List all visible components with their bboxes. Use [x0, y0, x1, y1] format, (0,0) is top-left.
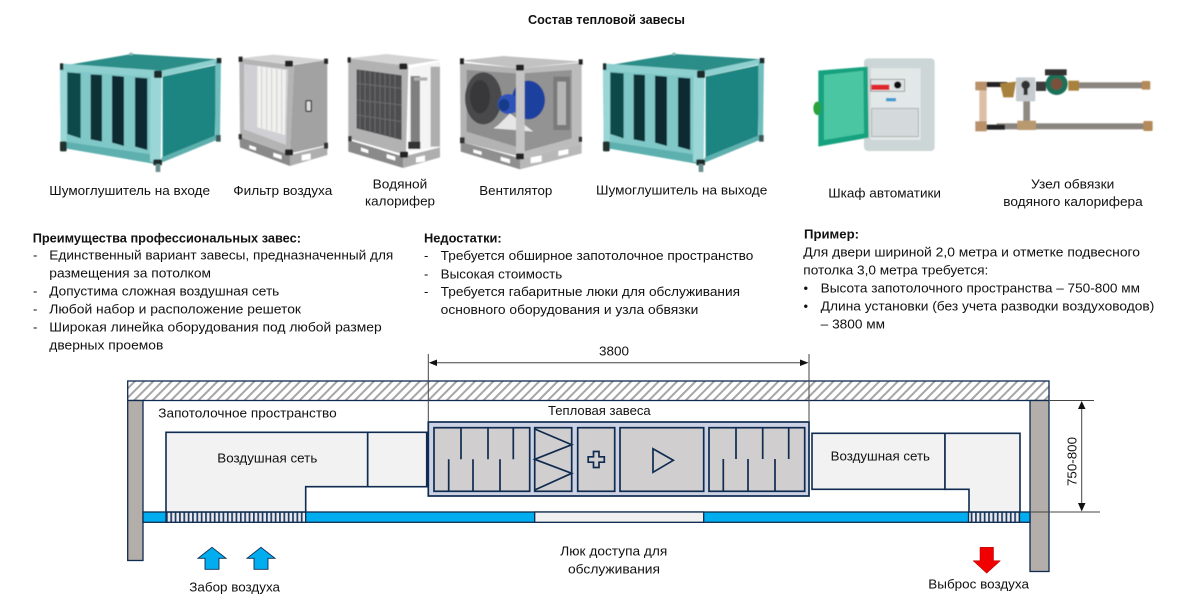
text block: example: Высота запотолочного пространства – 750-800 мм [821, 280, 1140, 295]
left air duct [166, 432, 368, 512]
fan section [620, 428, 704, 491]
caption: outlet silencer: Шумоглушитель на выходе [596, 182, 767, 197]
text block: advantages: Широкая линейка оборудования под любой размер [49, 320, 382, 335]
outlet silencer section [709, 428, 805, 491]
text block: advantages: - [33, 320, 37, 335]
text block: disadvantages: Требуется габаритные люки для обслуживания [441, 284, 740, 299]
icon: water heater [348, 54, 440, 168]
icon: automation cabinet [813, 58, 935, 151]
text block: advantages: Единственный вариант завесы, предназначенный для [49, 247, 393, 262]
heater section [578, 428, 615, 491]
caption: piping unit: водяного калорифера [1003, 194, 1143, 209]
label: access hatch: Люк доступа для [560, 543, 667, 558]
text block: disadvantages: Недостатки: [424, 230, 502, 245]
text block: advantages: Допустима сложная воздушная сеть [49, 284, 280, 299]
caption: water heater: калорифер [365, 194, 435, 209]
text block: example [803, 226, 1154, 331]
text block: example: • [804, 280, 808, 295]
text block: advantages: дверных проемов [49, 338, 163, 353]
dimension 750-800: 750-800 [1064, 437, 1080, 486]
left wall [128, 400, 143, 560]
dimension 3800 [428, 344, 809, 422]
text block: advantages: размещения за потолком [49, 266, 211, 281]
text block: advantages: - [33, 302, 37, 317]
intake grille [166, 512, 306, 522]
text block: example: Длина установки (без учета разводки воздуховодов) [821, 299, 1154, 314]
text block: disadvantages: - [424, 248, 428, 263]
label: access hatch [560, 543, 667, 576]
caption: air filter: Фильтр воздуха [233, 183, 333, 198]
left duct section [368, 432, 427, 487]
caption: inlet silencer: Шумоглушитель на входе [49, 183, 210, 198]
label: right air network: Воздушная сеть [831, 449, 930, 464]
label: left air network: Воздушная сеть [217, 451, 318, 466]
text block: disadvantages: Требуется обширное запотолочное пространство [441, 248, 753, 263]
caption: piping unit: Узел обвязки [1031, 176, 1114, 191]
text block: example: потолка 3,0 метра требуется: [803, 262, 988, 277]
caption: fan: Вентилятор [479, 183, 552, 198]
text block: example: • [804, 299, 808, 314]
caption: piping unit [1003, 176, 1143, 209]
text block: example: Пример: [804, 226, 859, 241]
arrow: intake 1 [198, 547, 226, 569]
section diagram [128, 344, 1100, 595]
right duct section [945, 433, 1020, 512]
label: ceiling space: Запотолочное пространство [158, 406, 337, 421]
text block: example: Для двери шириной 2,0 метра и отметке подвесного [803, 245, 1140, 260]
dimension 3800: 3800 [599, 344, 629, 359]
icon: inlet silencer [60, 53, 221, 172]
caption: water heater [365, 176, 435, 209]
text block: example: – 3800 мм [821, 316, 885, 331]
text block: advantages: - [33, 284, 37, 299]
text block: disadvantages: Высокая стоимость [441, 266, 563, 281]
filter section [535, 428, 572, 491]
inlet silencer section [434, 428, 530, 491]
label: thermal curtain: Тепловая завеса [548, 403, 651, 418]
icon: outlet silencer [603, 53, 764, 172]
icon: fan [460, 56, 583, 169]
caption: automation cabinet: Шкаф автоматики [828, 186, 941, 201]
label: air exhaust: Выброс воздуха [928, 576, 1030, 591]
dimension 750-800 [1030, 400, 1100, 512]
text block: advantages: - [33, 247, 37, 262]
icon: piping unit [975, 69, 1153, 131]
exhaust grille [968, 512, 1020, 522]
arrow: exhaust [973, 547, 1000, 573]
label: access hatch: обслуживания [568, 561, 660, 576]
text block: advantages [33, 230, 393, 353]
access hatch [535, 512, 704, 522]
text block: disadvantages [424, 230, 753, 317]
caption: water heater: Водяной [373, 176, 427, 191]
right wall [1030, 400, 1049, 572]
text block: advantages: Любой набор и расположение решеток [49, 302, 301, 317]
arrow: intake 2 [247, 547, 275, 569]
ceiling slab [128, 381, 1049, 400]
text block: disadvantages: - [424, 266, 428, 281]
title: Состав тепловой завесы [528, 12, 685, 27]
text block: disadvantages: основного оборудования и узла обвязки [441, 302, 698, 317]
thermal curtain unit [428, 422, 809, 496]
label: air intake: Забор воздуха [189, 580, 281, 595]
text block: disadvantages: - [424, 284, 428, 299]
suspended ceiling [143, 512, 1030, 522]
text block: advantages: Преимущества профессиональных завес: [33, 230, 301, 245]
right air duct [812, 433, 945, 489]
icon: air filter [239, 55, 328, 166]
